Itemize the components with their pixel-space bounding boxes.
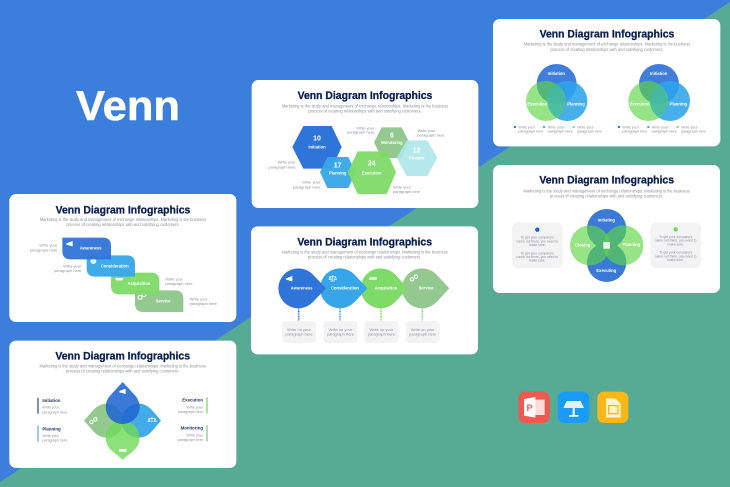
panel subtitle: process of creating relationships with and satisfying customers.	[66, 222, 180, 227]
note boxes: Write on your	[287, 327, 311, 332]
paragraph labels: paragraph here	[393, 189, 421, 194]
panel subtitle	[523, 188, 690, 198]
panel subtitle: Marketing is the study and management of exchange relationships. Marketing is the business	[281, 250, 448, 255]
step: Acquisition	[111, 273, 159, 294]
venn: left: Planning	[567, 102, 585, 107]
hexagon: Monitoring: 6	[390, 132, 394, 139]
hexagon: Planning: Planning	[329, 170, 347, 175]
panel title: Venn Diagram Infographics	[540, 29, 674, 41]
step: Acquisition: Acquisition	[128, 281, 151, 286]
label: Initiation: paragraph here	[42, 410, 67, 414]
panel: four-circle venn	[493, 165, 720, 293]
legend: paragraph here	[681, 130, 706, 134]
hexagon: Closure	[397, 140, 437, 176]
note boxes: paragraph here	[368, 332, 396, 337]
legend: Write your	[518, 125, 536, 129]
panel subtitle	[282, 103, 448, 113]
paragraph labels: paragraph here	[190, 301, 218, 306]
legend	[514, 125, 706, 134]
panel subtitle	[40, 217, 206, 227]
panel subtitle	[524, 42, 690, 52]
label: Execution: paragraph here	[178, 410, 203, 414]
label: Planning: Write your	[42, 434, 60, 438]
panel subtitle: process of creating relationships with and satisfying customers.	[66, 368, 179, 373]
note boxes: paragraph here	[285, 332, 313, 337]
label: Execution: Write your	[186, 406, 204, 410]
venn: right: Planning	[670, 102, 688, 107]
icon: Keynote	[558, 392, 589, 423]
venn: right: Execution	[630, 102, 650, 107]
paragraph labels: paragraph here	[165, 281, 193, 286]
hexagon: Execution: 24	[368, 161, 376, 168]
paragraph labels: Write your	[165, 276, 184, 281]
panel subtitle	[39, 363, 206, 373]
label: Initiation: Write your	[42, 406, 60, 410]
note box: right: To get your company's	[659, 251, 693, 255]
panel subtitle: process of creating relationships with and satisfying customers.	[550, 47, 664, 52]
hexagon: Monitoring	[374, 127, 409, 158]
note box: left: To get your company's	[521, 251, 554, 255]
paragraph labels	[30, 243, 218, 306]
step: Awareness	[62, 238, 111, 259]
hexagon: Execution	[348, 151, 396, 194]
step: Service	[135, 290, 183, 312]
teardrop: Acquisition: Acquisition	[375, 286, 398, 291]
paragraph labels: paragraph here	[347, 130, 375, 135]
hexagon: Planning	[320, 157, 356, 188]
hexagon: Planning: 17	[334, 163, 342, 170]
hexagon: Initiation: 10	[313, 136, 321, 143]
panel subtitle: Marketing is the study and management of exchange relationships. Marketing is the business	[39, 363, 206, 368]
paragraph labels: Write your	[393, 185, 412, 190]
note box: left: To get your company's	[521, 236, 554, 240]
note boxes: Write on your	[370, 327, 394, 332]
step: Service: Service	[156, 299, 171, 304]
note box: left: name out there, you need to	[517, 255, 558, 259]
note box: right: name out there, you need to	[655, 254, 697, 258]
teardrop: Service: Service	[419, 286, 434, 291]
panel: staircase steps	[9, 194, 236, 322]
paragraph labels: Write your	[190, 296, 208, 301]
panel title: Venn Diagram Infographics	[56, 204, 190, 216]
panel title: Venn Diagram Infographics	[55, 350, 190, 362]
note boxes: Write on your	[329, 327, 353, 332]
teardrop: Awareness: Awareness	[291, 286, 313, 291]
venn: four circles: Initiating	[598, 217, 615, 222]
label: Monitoring	[178, 425, 208, 442]
note box: right: make sure.	[667, 242, 684, 246]
note box: right: make sure.	[667, 258, 684, 262]
paragraph labels: Write your	[63, 263, 82, 268]
hexagon: Execution: Execution	[362, 170, 382, 175]
paragraph labels: Write your	[356, 125, 375, 130]
paragraph labels: Write your	[417, 128, 436, 133]
leaf: right	[122, 404, 161, 438]
panel subtitle: Marketing is the study and management of exchange relationships. Marketing is the business	[40, 217, 206, 222]
leaf: left	[84, 404, 124, 438]
panel subtitle: Marketing is the study and management of exchange relationships. Marketing is the business	[282, 103, 448, 108]
teardrop: Service	[402, 268, 449, 308]
venn: left: Execution	[527, 102, 548, 107]
legend: paragraph here	[518, 130, 543, 134]
legend: Write your	[577, 125, 594, 129]
teardrop: Acquisition	[361, 268, 408, 308]
label: Monitoring: Write your	[186, 434, 204, 438]
note box: left: make sure.	[529, 243, 546, 247]
note box: left: make sure.	[529, 259, 546, 263]
teardrop: Awareness	[278, 268, 326, 308]
note box: right: To get your company's	[659, 235, 693, 239]
legend: Write your	[681, 125, 698, 129]
legend: paragraph here	[548, 130, 573, 134]
hexagon: Closure: 12	[413, 147, 421, 154]
leaf: bottom	[106, 421, 140, 460]
paragraph labels	[268, 125, 445, 194]
note box: right: name out there, you need to	[655, 239, 697, 243]
panel: four-leaf diagram	[9, 341, 236, 468]
heading: Venn: Venn	[76, 82, 180, 129]
paragraph labels: Write your	[39, 243, 58, 248]
label: Monitoring: paragraph here	[178, 438, 203, 442]
panel title: Venn Diagram Infographics	[539, 175, 674, 187]
hexagon: Initiation: Initiation	[308, 144, 326, 149]
note box: left: name out there, you need to	[517, 239, 558, 243]
label: Planning: Planning	[42, 426, 61, 431]
paragraph labels: paragraph here	[268, 164, 296, 169]
label: Planning: paragraph here	[42, 439, 67, 443]
label: Initiation: Initiation	[42, 398, 61, 403]
icon: Google Slides	[597, 392, 628, 423]
panel subtitle: process of creating relationships with and satisfying customers.	[550, 193, 663, 198]
venn: right: Initiation	[650, 71, 668, 76]
legend: paragraph here	[622, 130, 647, 134]
teardrop: Consideration: Consideration	[331, 286, 359, 291]
step: Consideration: Consideration	[101, 263, 129, 268]
label: Planning	[37, 426, 67, 443]
panel subtitle: process of creating relationships with and satisfying customers.	[308, 108, 422, 113]
venn: left	[526, 64, 587, 121]
step: Consideration	[87, 255, 135, 277]
legend: Write your	[652, 125, 669, 129]
venn: four circles	[570, 209, 643, 282]
note boxes: Write on your	[411, 327, 435, 332]
label: Execution	[178, 397, 208, 414]
paragraph labels: paragraph here	[417, 133, 445, 138]
hexagon: Initiation	[292, 126, 342, 169]
note box: right	[650, 223, 701, 268]
venn: four circles: Closing	[575, 243, 591, 248]
note boxes	[282, 321, 440, 343]
panel title: Venn Diagram Infographics	[298, 90, 432, 102]
panel subtitle: process of creating relationships with and satisfying customers.	[308, 255, 421, 260]
icon: PowerPoint: P	[527, 403, 533, 413]
label: Execution: Execution	[182, 398, 203, 403]
hexagon: Monitoring: Monitoring	[381, 140, 403, 145]
legend: Write your	[548, 125, 565, 129]
leaf: top	[106, 382, 140, 424]
paragraph labels: Write your	[302, 180, 321, 185]
panel subtitle: Marketing is the study and management of exchange relationships. Marketing is the business	[523, 188, 690, 193]
panel: hexagon diagram	[252, 80, 478, 208]
hexagon: Closure: Closure	[409, 155, 425, 160]
paragraph labels: paragraph here	[293, 184, 321, 189]
panel subtitle: Marketing is the study and management of exchange relationships. Marketing is the business	[524, 42, 690, 47]
label: Initiation	[37, 398, 67, 414]
note boxes: paragraph here	[409, 332, 437, 337]
panel: two three-circle venns	[493, 19, 720, 146]
venn: right	[628, 64, 690, 121]
app icons	[518, 392, 628, 423]
note box: left	[512, 223, 563, 268]
paragraph labels: Write your	[278, 160, 296, 165]
panel subtitle	[281, 250, 448, 260]
paragraph labels: paragraph here	[54, 268, 82, 273]
legend: paragraph here	[577, 130, 602, 134]
teardrop: Consideration	[320, 268, 367, 308]
panel title: Venn Diagram Infographics	[297, 236, 432, 248]
legend: paragraph here	[652, 130, 677, 134]
step: Awareness: Awareness	[80, 245, 102, 250]
venn: four circles: Planning	[623, 242, 641, 247]
stems	[299, 308, 422, 322]
label: Monitoring: Monitoring	[181, 426, 203, 431]
panel: teardrop process	[251, 226, 478, 354]
paragraph labels: paragraph here	[30, 247, 58, 252]
note boxes: paragraph here	[327, 332, 355, 337]
legend: Write your	[622, 125, 640, 129]
venn: four circles: Executing	[596, 268, 617, 273]
venn: left: Initiation	[548, 71, 565, 76]
